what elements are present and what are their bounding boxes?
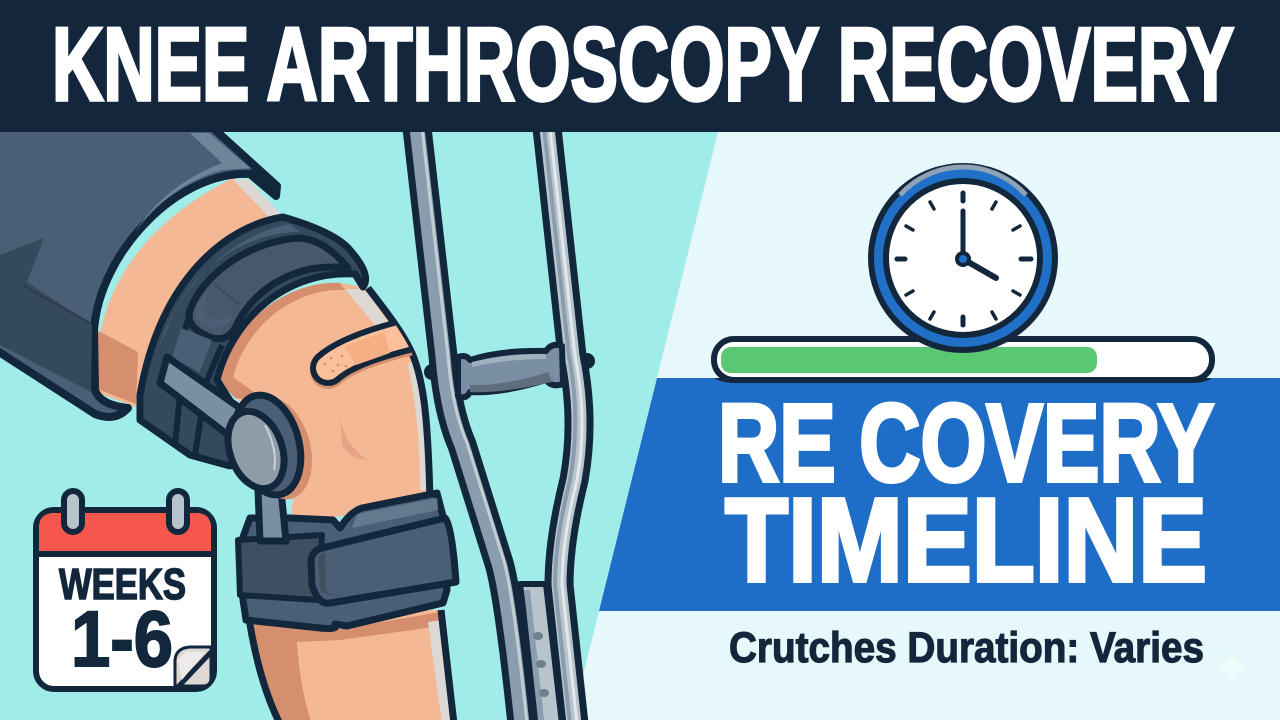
- icon: calendar: [36, 491, 214, 689]
- hinge dial: [218, 404, 294, 496]
- illustration: leg with brace: [0, 128, 456, 720]
- hinge assembly: [218, 388, 323, 541]
- icon: clock: [871, 166, 1055, 350]
- crutch left rail: [417, 128, 527, 720]
- knee skin: [218, 283, 430, 525]
- clock hands: [963, 211, 996, 278]
- upper brace strap: [189, 238, 348, 339]
- panel: right pale background: [572, 132, 1280, 720]
- lower leg: [248, 610, 456, 720]
- heading line 2: TIMELINE: [725, 474, 1207, 607]
- upper hinge arm: [160, 357, 240, 435]
- sleeve: [0, 128, 277, 417]
- progress bar: [714, 339, 1212, 380]
- crutch hand grip: [458, 345, 563, 397]
- illustration: crutch: [417, 128, 595, 720]
- crutch grip knobs: [424, 353, 595, 380]
- bandage: [324, 332, 420, 372]
- thigh skin: [95, 178, 285, 410]
- clock ticks: [897, 193, 1031, 325]
- icon: sparkle: [1212, 647, 1252, 687]
- panel: blue recovery timeline band: [599, 378, 1280, 611]
- calendar text: weeks: WEEKS: [59, 560, 186, 609]
- lower brace band: [238, 493, 456, 628]
- crutch right rail: [544, 128, 582, 720]
- lower brace strap: [311, 518, 456, 603]
- calendar rings: [64, 491, 187, 532]
- caption: Crutches Duration: Varies: [729, 624, 1204, 672]
- calendar text: range: 1-6: [71, 594, 173, 683]
- title banner: [0, 0, 1280, 132]
- calendar page fold: [175, 647, 213, 688]
- upper brace band: [140, 217, 366, 466]
- crutch lower extension: [520, 584, 562, 720]
